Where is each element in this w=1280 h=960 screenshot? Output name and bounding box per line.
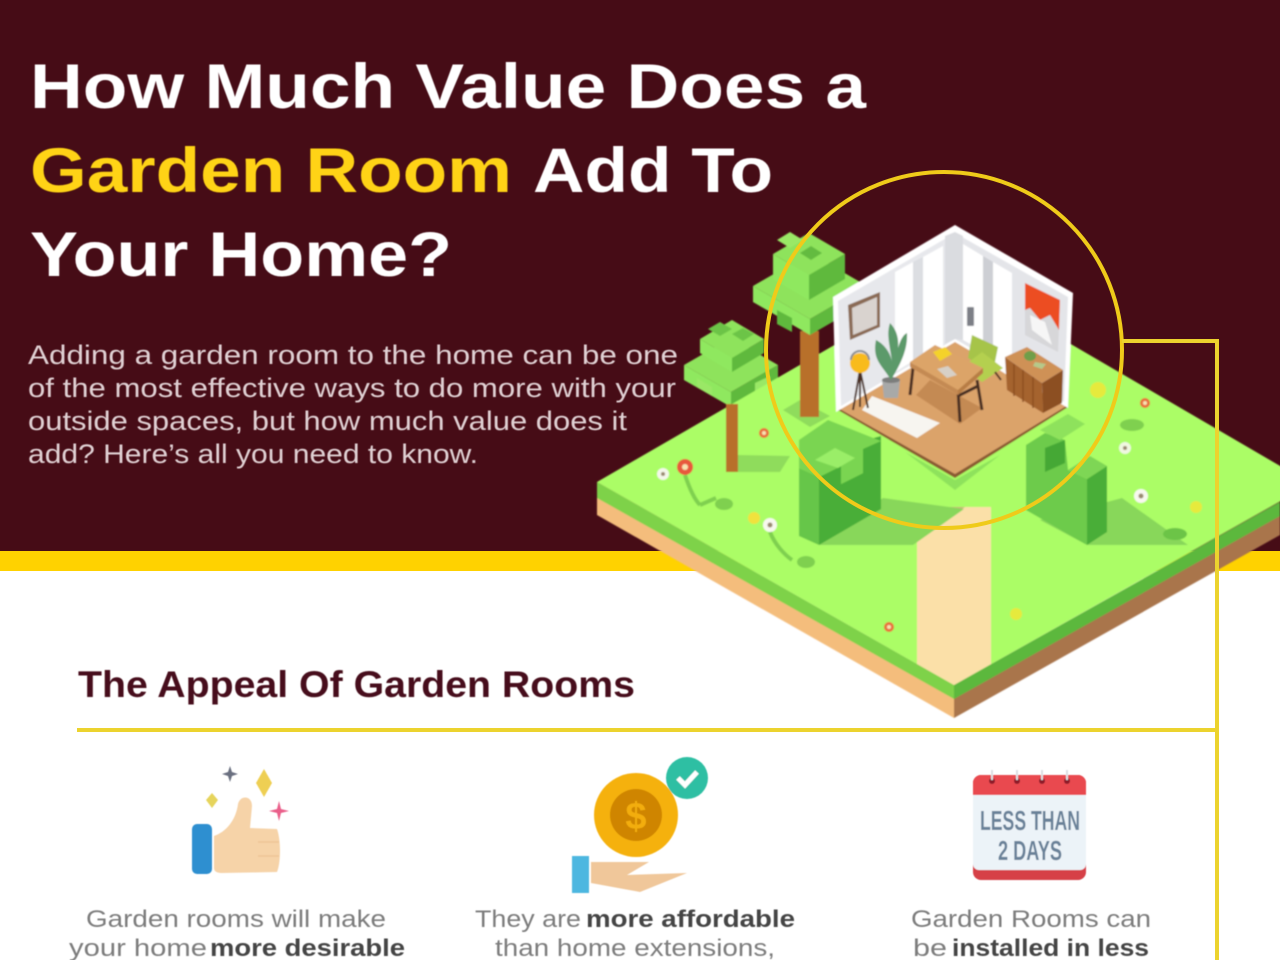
wall poster bbox=[1025, 283, 1060, 352]
garden path bbox=[917, 507, 991, 685]
wall picture bbox=[848, 292, 880, 340]
icon: sparkles bbox=[206, 766, 289, 821]
highlight circle around room bbox=[766, 172, 1122, 528]
garden room bbox=[833, 225, 1085, 490]
right hedge shadow and hedge bbox=[1026, 433, 1188, 545]
intro paragraph: Adding a garden room to the home can be one bbox=[28, 340, 678, 370]
caption: They are bbox=[475, 906, 581, 933]
appeal item: more affordable bbox=[475, 757, 795, 960]
floor lamp bbox=[850, 351, 870, 410]
title bbox=[30, 52, 867, 290]
desk with chair bbox=[910, 335, 1003, 424]
caption bbox=[911, 906, 1151, 960]
light switch bbox=[967, 307, 974, 326]
isometric garden illustration bbox=[597, 225, 1280, 718]
room floor bbox=[838, 340, 1068, 478]
flowers and leaves bbox=[657, 382, 1202, 632]
room walls bbox=[833, 225, 955, 412]
intro paragraph bbox=[28, 340, 678, 469]
caption: Garden Rooms can bbox=[911, 906, 1151, 933]
caption: more affordable bbox=[586, 906, 795, 933]
icon: calendar: LESS THAN bbox=[980, 805, 1080, 836]
tree: small front tree bbox=[684, 320, 778, 472]
caption bbox=[69, 906, 405, 960]
caption bbox=[475, 906, 795, 960]
potted plant bbox=[875, 323, 907, 398]
icon: calendar bbox=[973, 770, 1086, 880]
title: Add To bbox=[533, 136, 773, 206]
title: Garden Room bbox=[30, 136, 512, 206]
intro paragraph: of the most effective ways to do more with your bbox=[28, 373, 676, 403]
appeal item: quick installation bbox=[911, 770, 1151, 960]
section heading: the appeal of garden rooms: The Appeal Of Garden Rooms bbox=[78, 664, 635, 705]
left hedge shadow and hedge bbox=[799, 420, 964, 545]
title: How Much Value Does a bbox=[30, 52, 867, 122]
caption: Garden rooms will make bbox=[86, 906, 386, 933]
title: Your Home? bbox=[30, 220, 452, 290]
icon: calendar: 2 DAYS bbox=[998, 835, 1062, 866]
sideboard cabinet bbox=[1005, 347, 1063, 413]
icon: coin in hand bbox=[572, 757, 708, 893]
island grass surface bbox=[597, 276, 1280, 685]
intro paragraph: outside spaces, but how much value does it bbox=[28, 406, 628, 436]
icon: thumbs up bbox=[192, 766, 289, 874]
tree: large back tree bbox=[753, 232, 867, 417]
connector lines from circle to section divider bbox=[77, 341, 1217, 960]
icon: coin in hand: $ bbox=[625, 796, 647, 838]
island base layers bbox=[597, 482, 1280, 718]
intro paragraph: add? Here’s all you need to know. bbox=[28, 439, 478, 469]
header background panel bbox=[0, 0, 1280, 571]
rug bbox=[862, 396, 940, 438]
tree trunks above grass with shadows bbox=[726, 335, 830, 472]
appeal item: more desirable bbox=[69, 766, 405, 960]
